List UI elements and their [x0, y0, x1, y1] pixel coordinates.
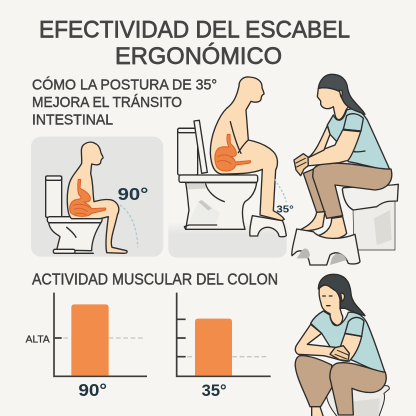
- hair: [318, 74, 365, 114]
- subtitle: posture: INTESTINAL: [32, 112, 113, 128]
- label: ALTA: ALTA: [26, 335, 50, 346]
- arm and hands: [294, 126, 361, 176]
- shirt: [311, 311, 385, 372]
- bar chart: 90 degrees: [26, 293, 147, 400]
- ear: [341, 293, 345, 302]
- ankle: [312, 407, 323, 416]
- figure: seated person 35: [210, 77, 284, 221]
- eyes: [323, 296, 332, 306]
- face and neck: [317, 88, 348, 120]
- label: 90 degrees: 90°: [118, 184, 148, 204]
- arc: 90 degree guide: [120, 205, 138, 247]
- reference dashes: [187, 355, 269, 359]
- subtitle: posture: [32, 76, 217, 128]
- figure: woman slouching: [295, 274, 389, 416]
- icon: toilet slouching: [325, 386, 389, 416]
- pants: [313, 163, 392, 218]
- panel: 90 degree posture: [31, 137, 163, 257]
- icon: toilet 90: [46, 176, 102, 253]
- right leg: [330, 363, 386, 415]
- left leg: [295, 356, 333, 407]
- icon: intestine 90: [70, 179, 106, 216]
- arms and hands: [295, 324, 362, 361]
- axes: [177, 293, 271, 376]
- label: 35: 35°: [202, 381, 227, 400]
- face and neck: [319, 285, 343, 325]
- figure: seated person 90: [67, 142, 127, 253]
- icon: stool small: [250, 216, 286, 237]
- label: 90: 90°: [78, 380, 107, 400]
- figure: woman on stool: [292, 74, 398, 265]
- feet and ankles: [300, 212, 347, 240]
- bar: [195, 319, 232, 376]
- axes: [54, 293, 147, 376]
- icon: stool large: [292, 229, 360, 265]
- title: EFECTIVIDAD DEL ESCABEL: [39, 16, 350, 44]
- panel: 35 degree posture: [168, 77, 294, 258]
- sleeve: [343, 114, 363, 131]
- shirt: [327, 109, 390, 170]
- stool shadow: [297, 249, 347, 265]
- bar: [71, 304, 109, 376]
- subtitle: posture: CÓMO LA POSTURA DE 35°: [32, 76, 217, 94]
- arc: 35 degree guide: [275, 179, 286, 202]
- icon: toilet 35: [178, 120, 258, 229]
- ear: [339, 90, 342, 97]
- label: 35 degrees: 35°: [276, 205, 294, 216]
- icon: intestine 35: [215, 134, 251, 171]
- hair: [318, 274, 365, 316]
- title: ERGONÓMICO: [115, 43, 282, 70]
- reference dashes: [63, 336, 144, 340]
- subtitle: posture: MEJORA EL TRÁNSITO: [32, 94, 182, 111]
- sleeve: [345, 317, 364, 336]
- floor panel: [168, 222, 287, 258]
- bar chart: 35 degrees: [177, 293, 271, 400]
- heading: muscular activity: ACTIVIDAD MUSCULAR DEL COLON: [32, 272, 278, 288]
- back shin: [303, 168, 327, 212]
- icon: toilet woman: [342, 184, 398, 250]
- title: [39, 16, 350, 70]
